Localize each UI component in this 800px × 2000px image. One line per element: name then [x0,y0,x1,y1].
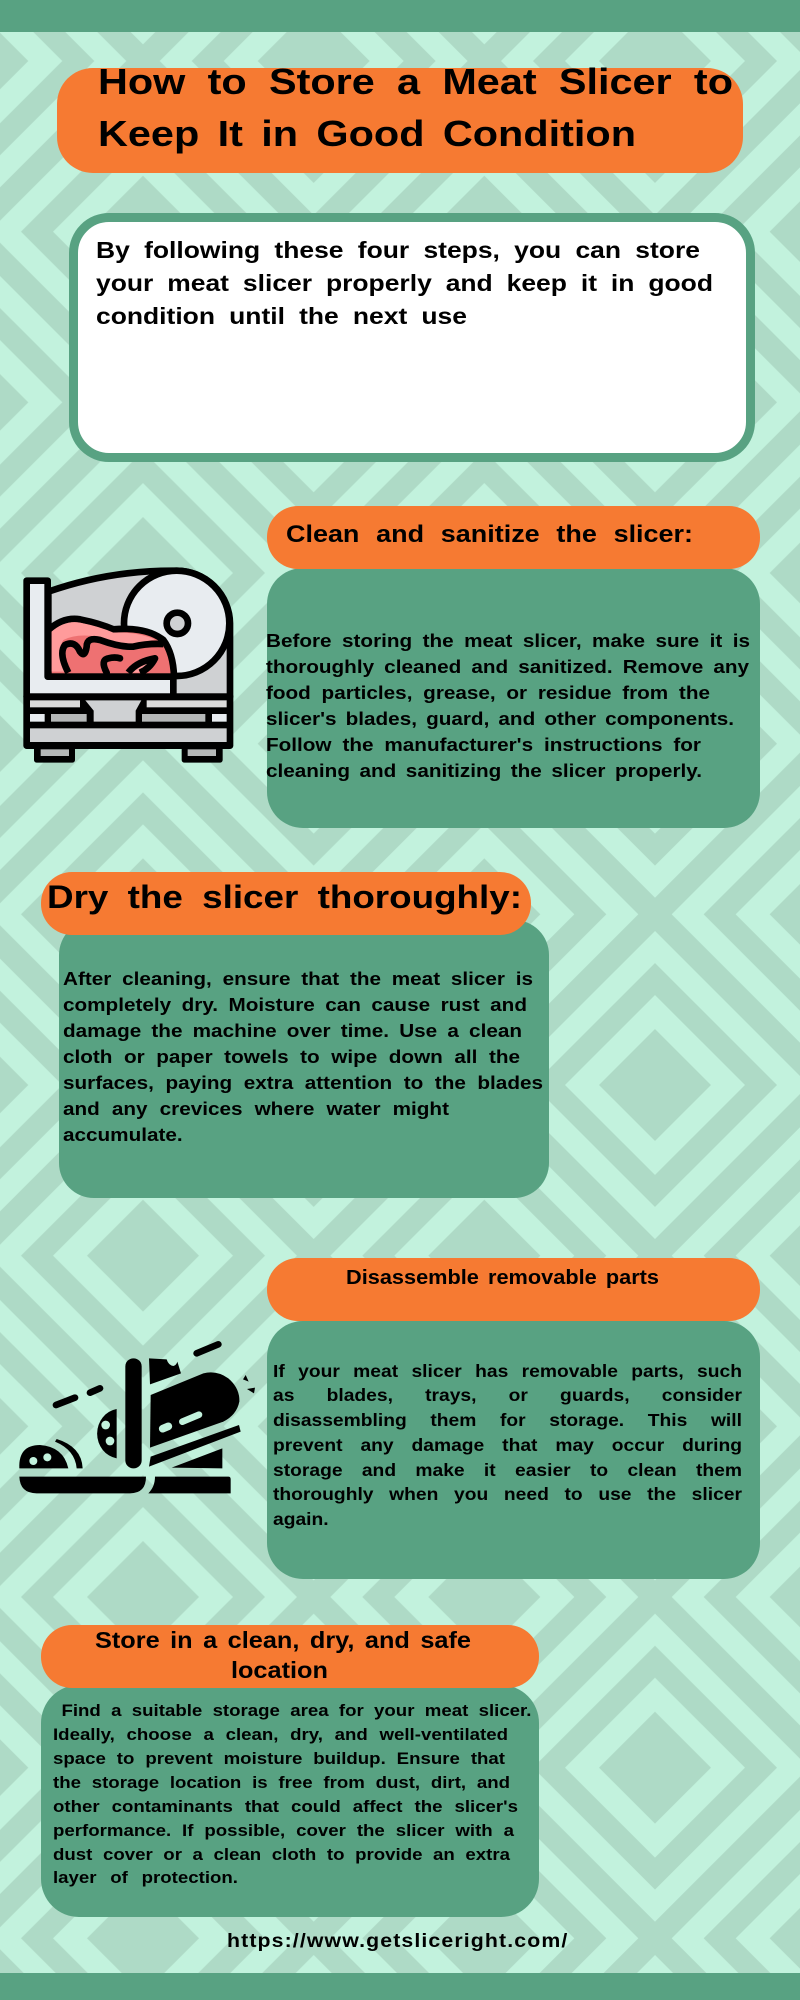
step 4 text: dust cover or a clean cloth to provide an extra [52,1846,509,1864]
step 4 heading: location [231,1656,328,1682]
step 2 panel [59,920,549,1198]
title: Keep It in Good Condition [98,112,636,154]
step 4 text: the storage location is free from dust, dirt, and [52,1774,509,1792]
step 1 text: slicer's blades, guard, and other components. [266,709,734,729]
step 2 text: accumulate. [63,1125,183,1145]
step 1 text: Before storing the meat slicer, make sure it is [266,631,750,651]
step 2 heading panel [41,872,531,935]
step 3 text: as blades, trays, or guards, consider [273,1385,742,1405]
intro text: By following these four steps, you can store [96,236,700,262]
step 2 text: surfaces, paying extra attention to the blades [63,1073,543,1093]
step 1 text: thoroughly cleaned and sanitized. Remove any [266,657,749,677]
step 1 text [266,631,750,781]
step 4 text: other contaminants that could affect the slicer's [52,1798,517,1816]
step 3 text: If your meat slicer has removable parts, such [273,1360,742,1380]
step 1 text: food particles, grease, or residue from the [266,683,710,703]
step 1 panel [267,568,760,828]
step 4 heading: Store in a clean, dry, and safe [95,1626,471,1652]
intro text: your meat slicer properly and keep it in good [96,270,713,296]
step 2 text [63,969,543,1145]
website url: https://www.getsliceright.com/ [227,1931,568,1952]
step 1 text: Follow the manufacturer's instructions for [266,735,701,755]
step 3 text: prevent any damage that may occur during [273,1435,742,1455]
step 3 text: again. [273,1509,329,1529]
intro text: condition until the next use [96,302,467,328]
title: How to Store a Meat Slicer to [98,60,733,102]
step 3 heading: Disassemble removable parts [346,1266,659,1289]
intro panel [69,213,755,462]
step 2 text: cloth or paper towels to wipe down all the [63,1047,520,1067]
step 4 heading panel [41,1625,539,1688]
step 4 text: Ideally, choose a clean, dry, and well-ventilated [52,1726,507,1744]
step 3 heading panel [267,1258,760,1321]
step 3 text: disassembling them for storage. This will [273,1410,742,1430]
step 3 panel [267,1321,760,1579]
top bar [0,0,800,32]
step 3 text [273,1360,742,1529]
step 1 heading: Clean and sanitize the slicer: [286,521,693,548]
step 4 text: layer of protection. [52,1869,237,1887]
step 4 text: space to prevent moisture buildup. Ensure that [52,1750,504,1768]
step 2 text: and any crevices where water might [63,1099,449,1119]
step 3 text: thoroughly when you need to use the slicer [273,1484,742,1504]
step 2 text: After cleaning, ensure that the meat slicer is [63,969,533,989]
intro text [96,236,713,328]
step 4 text: Find a suitable storage area for your meat slicer. [61,1702,531,1720]
title panel [57,68,743,173]
step 2 text: damage the machine over time. Use a clean [63,1021,522,1041]
step 4 heading [95,1626,471,1682]
step 2 heading: Dry the slicer thoroughly: [47,879,522,915]
step 4 text: performance. If possible, cover the slicer with a [52,1822,513,1840]
title [98,60,733,154]
icon: black slicer silhouette [19,1341,255,1494]
step 4 panel [41,1685,539,1917]
step 3 text: storage and make it easier to clean them [273,1460,742,1480]
step 4 text [52,1702,531,1887]
bottom bar [0,1973,800,2000]
step 2 text: completely dry. Moisture can cause rust and [63,995,527,1015]
icon: meat slicer with steak [23,567,234,763]
step 1 heading panel [267,506,760,569]
step 1 text: cleaning and sanitizing the slicer properly. [266,761,702,781]
